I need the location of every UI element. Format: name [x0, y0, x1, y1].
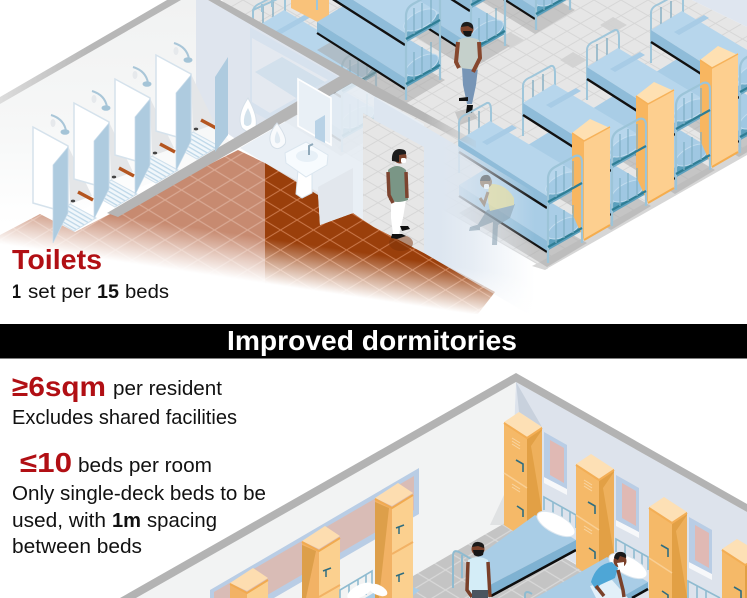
long window on left wall	[210, 468, 419, 598]
floor fade to white	[548, 155, 747, 290]
wall top left	[120, 373, 516, 598]
banner: Improved dormitories	[0, 324, 747, 358]
locker	[375, 483, 413, 598]
text: beds per room: beds per room	[78, 455, 212, 477]
left wall	[134, 382, 516, 598]
bunk bed	[253, 0, 381, 156]
light terracotta floor	[0, 150, 265, 340]
end door	[215, 57, 228, 152]
person standing with white T-shirt	[467, 542, 490, 598]
panel: toilets and double-deck dormitory illustration	[0, 0, 747, 340]
text: beds per room: Only single-deck beds to be	[12, 483, 266, 505]
text: beds per room: used, with	[12, 510, 106, 532]
bunk beds with lockers: front row	[459, 0, 747, 267]
stall 2	[74, 91, 137, 219]
bunk rail rear	[253, 0, 284, 17]
mattress of left bed	[365, 580, 420, 598]
bunk and locker 3	[587, 30, 738, 194]
pale urinal behind glass	[270, 123, 286, 149]
glass panel with bed behind	[250, 27, 340, 120]
text: space per resident: Excludes shared facilities	[12, 407, 237, 429]
right wall	[510, 382, 747, 598]
text: beds per room: ≤10	[20, 447, 72, 478]
white cleanup band	[0, 314, 747, 324]
bed 3 head rail	[688, 581, 720, 598]
dark terracotta floor	[265, 163, 495, 324]
banner: Improved dormitories: Improved dormitories	[227, 325, 517, 356]
dormitory tiled floor	[222, 0, 747, 266]
dormitory-facing wall	[374, 97, 547, 315]
head rail of left bed	[340, 571, 372, 598]
bunk bed	[447, 0, 575, 34]
window 1	[544, 432, 567, 495]
text: beds per room: spacing	[147, 510, 217, 532]
fade to white at bottom of illustration	[0, 190, 560, 324]
text: toilet ratio: set per	[28, 282, 92, 303]
stall 1	[33, 115, 96, 243]
corner shadow	[490, 495, 504, 525]
doorway tiled floor	[363, 113, 424, 253]
bunk and locker 4	[651, 0, 747, 157]
text: beds per room: between beds	[12, 536, 142, 558]
locker	[302, 526, 340, 598]
text: space per resident: per resident	[113, 378, 222, 400]
lockers on right wall: third	[649, 497, 687, 598]
single bed 2	[525, 539, 651, 598]
seated person with blue T-shirt	[590, 552, 628, 598]
shower stalls	[33, 43, 228, 243]
bunk bed	[317, 0, 445, 104]
text: toilet ratio: beds	[125, 282, 169, 303]
lockers on right wall: first	[504, 412, 542, 540]
partition wall top	[107, 76, 352, 217]
mirror	[298, 79, 331, 145]
text: space per resident	[12, 371, 237, 429]
urinal	[240, 98, 256, 132]
lockers on right wall: fourth	[722, 539, 747, 598]
stall 3	[115, 67, 178, 195]
text: beds per room: 1m	[112, 510, 141, 532]
bunk and locker 2	[523, 66, 674, 230]
wash area glass wall	[240, 83, 424, 225]
floor edge	[532, 146, 747, 270]
locker shadow on wall	[516, 382, 542, 427]
text: space per resident: ≥6sqm	[12, 371, 106, 402]
pillow of left bed	[345, 579, 375, 598]
single bed 1	[453, 497, 579, 596]
right back wall	[692, 0, 747, 27]
bunk bed	[382, 0, 510, 70]
bunk and locker 1	[459, 103, 610, 267]
bunk beds: rear rows	[253, 0, 575, 156]
lockers on right wall: second	[576, 454, 614, 582]
wall top right	[516, 373, 747, 512]
text: toilet ratio: 15	[97, 282, 119, 303]
main wall top	[208, 0, 476, 148]
pillow on bed at locker	[367, 581, 389, 598]
left lockers	[230, 483, 420, 598]
text: beds per room	[12, 447, 266, 558]
darker floor tiles	[497, 17, 707, 68]
wall pillar	[318, 168, 353, 225]
stall 4	[156, 43, 219, 171]
windows on right wall	[544, 432, 712, 580]
toilet back wall	[196, 0, 345, 142]
text: toilet ratio	[12, 282, 169, 303]
person standing with black mask	[455, 22, 480, 125]
window 3	[689, 517, 712, 580]
text: toilet ratio: 1	[12, 282, 21, 303]
heading: Toilets: Toilets	[12, 244, 102, 275]
sink	[285, 142, 328, 198]
seated person behind glass	[469, 175, 515, 245]
person in green T-shirt with white mask	[388, 149, 413, 251]
panel: improved dormitory illustration	[120, 373, 747, 598]
locker rear	[291, 0, 329, 28]
left wall top	[0, 0, 181, 104]
tiled floor	[375, 523, 633, 598]
locker	[230, 568, 268, 598]
window 2	[616, 475, 639, 538]
toilet left wall	[0, 0, 238, 225]
